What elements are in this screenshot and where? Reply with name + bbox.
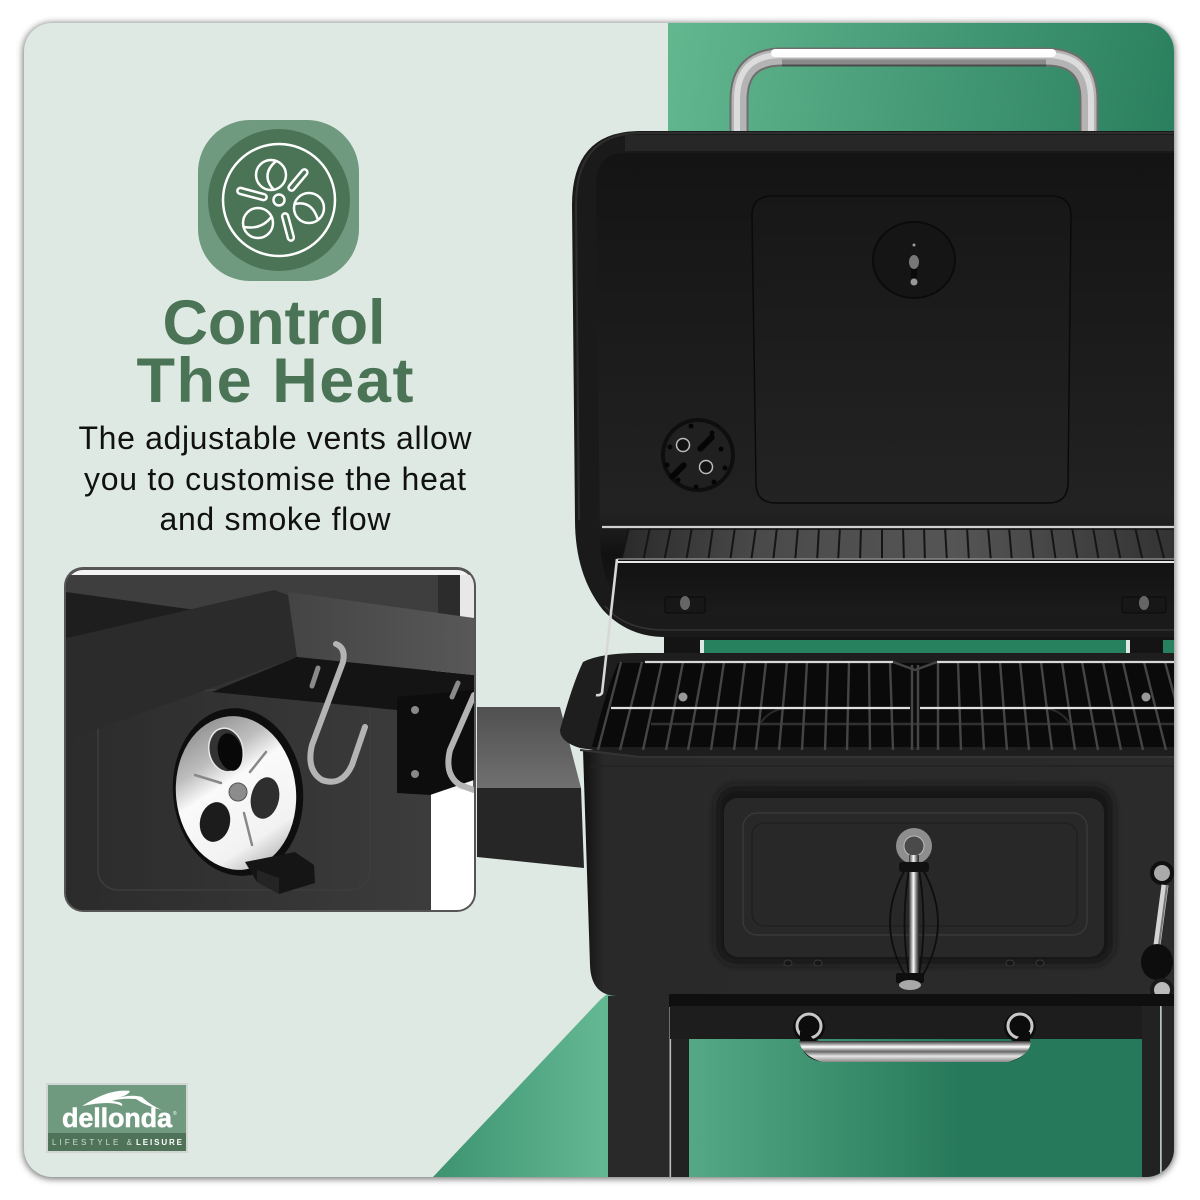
logo: dellonda: dellonda [62, 1103, 173, 1133]
inset bracket [397, 690, 474, 795]
description text: The adjustable vents allow [78, 420, 472, 456]
side shelf [477, 707, 584, 868]
logo: dellonda: LIFESTYLE & [52, 1138, 133, 1147]
title: The Heat [136, 346, 414, 416]
grill lid [572, 131, 1174, 637]
logo: dellonda: LEISURE [136, 1138, 183, 1147]
inner lid plate [752, 196, 1071, 503]
green background top [668, 23, 1174, 131]
firebox access door [716, 786, 1113, 966]
side handle [1141, 861, 1174, 1002]
icon: vent badge [198, 120, 359, 281]
lower chrome handle [793, 1012, 1036, 1062]
logo: dellonda: ® [173, 1110, 177, 1117]
firebox rim and cooking grate [560, 653, 1189, 766]
inset side shelf arm [78, 590, 297, 729]
lid support rod [596, 559, 617, 695]
grill stand [608, 994, 1174, 1177]
lid handle [737, 53, 1091, 131]
logo: dellonda [47, 1084, 187, 1152]
inset vent disc [172, 708, 304, 876]
green background bottom wedge [433, 990, 1174, 1177]
thermometer mount [873, 222, 955, 298]
screws [665, 596, 1166, 613]
lid warming rack [602, 527, 1174, 562]
title [137, 298, 413, 402]
inset photo: vent close-up [64, 567, 476, 912]
firebox body [583, 750, 1174, 996]
door handle [890, 828, 938, 990]
hinge gap with green slit [664, 637, 1174, 653]
inset latch [245, 852, 315, 894]
description text: and smoke flow [160, 501, 391, 537]
inset body panel [66, 575, 431, 910]
description text [79, 426, 472, 530]
description text: you to customise the heat [84, 461, 466, 497]
title: Control [162, 288, 386, 358]
inset hooks [310, 644, 474, 790]
lid vent [661, 418, 735, 492]
